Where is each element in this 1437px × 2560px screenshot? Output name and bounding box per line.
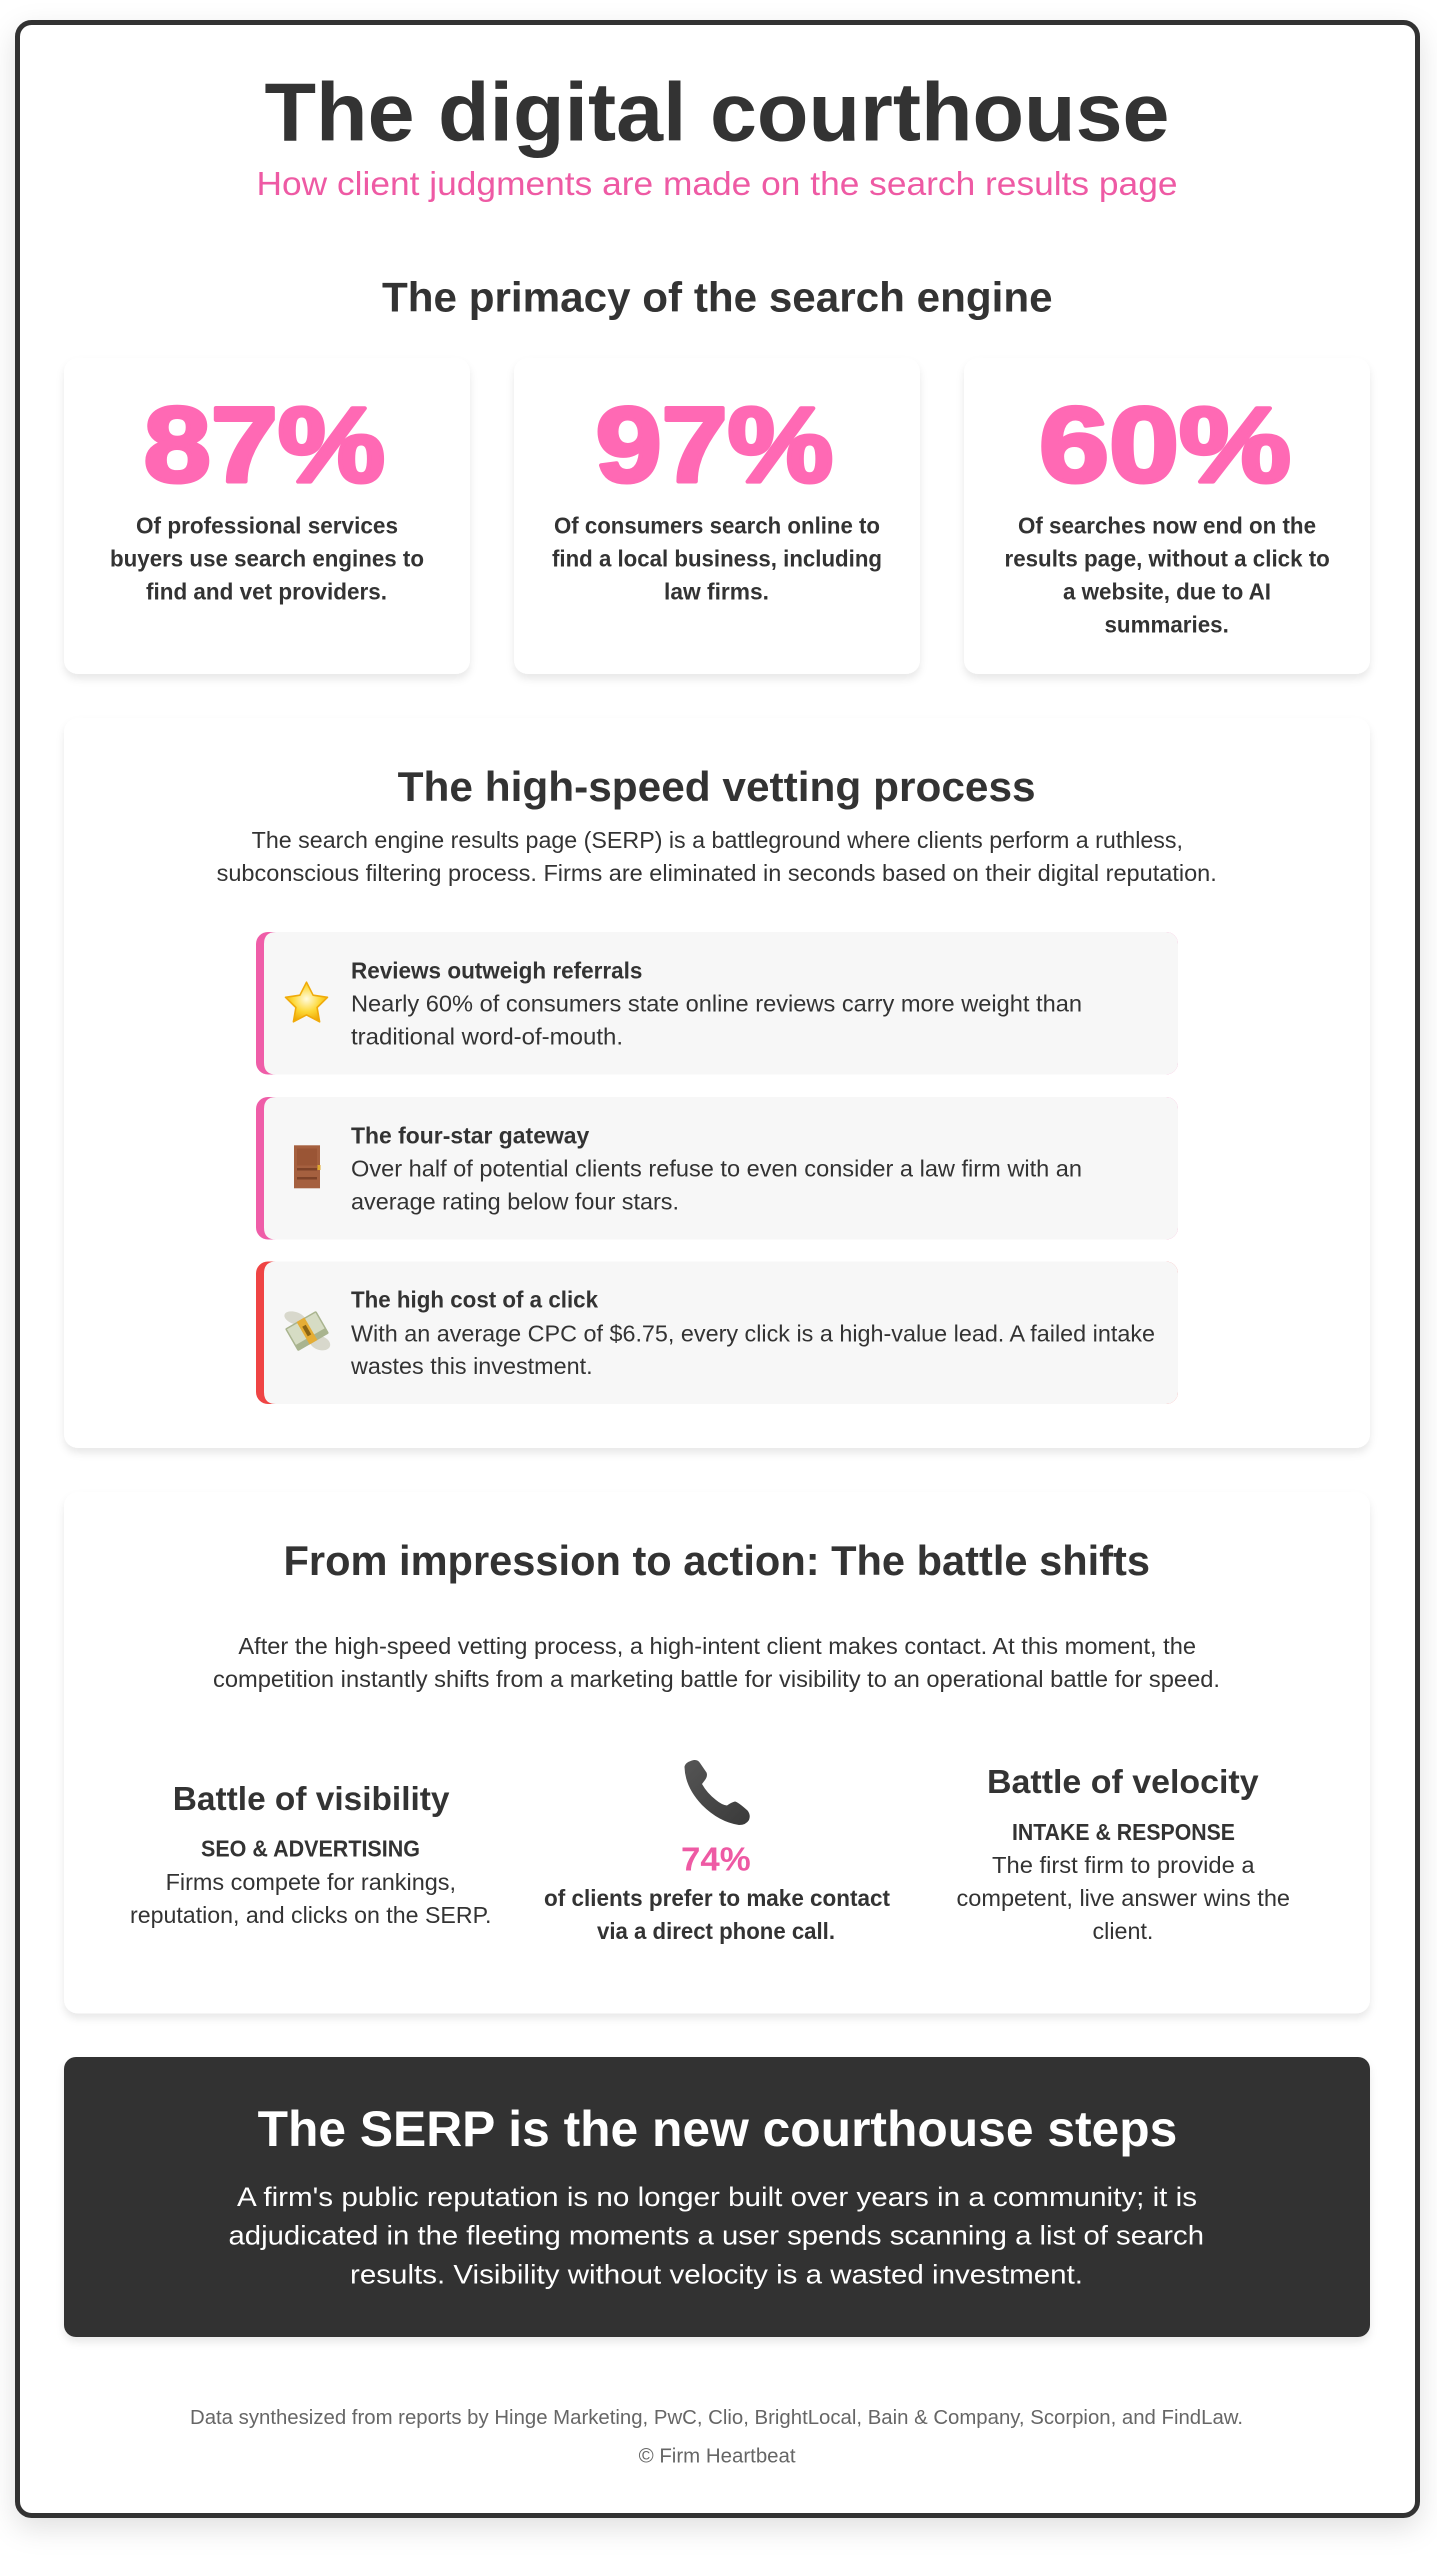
- conclusion text: [228, 2182, 1204, 2289]
- description: The first firm to provide a: [992, 1852, 1255, 1878]
- conclusion text: results. Visibility without velocity is a wasted investment.: [350, 2259, 1083, 2289]
- conclusion text: A firm's public reputation is no longer built over years in a community; it is: [237, 2182, 1197, 2212]
- icon: door: [294, 1145, 320, 1188]
- panel: high-speed vetting process: [64, 718, 1370, 1448]
- item text: The high cost of a click: [351, 1287, 598, 1313]
- item text: wastes this investment.: [350, 1353, 593, 1379]
- stat description: via a direct phone call.: [597, 1918, 835, 1944]
- description: Firms compete for rankings,: [166, 1869, 456, 1895]
- item text: Nearly 60% of consumers state online reviews carry more weight than: [351, 991, 1082, 1017]
- subtitle: How client judgments are made on the search results page: [256, 165, 1178, 202]
- intro paragraph: [217, 827, 1217, 886]
- item text: The four-star gateway: [351, 1122, 589, 1148]
- item text: traditional word-of-mouth.: [351, 1023, 623, 1049]
- stat card: 97%: [514, 358, 920, 674]
- item text: [350, 1287, 1155, 1379]
- stat number: 97%: [596, 384, 833, 504]
- column: phone stat: [544, 1760, 890, 1944]
- stat description: [544, 1885, 890, 1944]
- intro paragraph: The search engine results page (SERP) is a battleground where clients perform a ruthless,: [252, 827, 1183, 853]
- stat description: summaries.: [1104, 612, 1229, 638]
- conclusion text: adjudicated in the fleeting moments a user spends scanning a list of search: [228, 2221, 1204, 2251]
- heading: The high-speed vetting process: [398, 763, 1036, 810]
- stat card: 87%: [64, 358, 470, 674]
- item: the four-star gateway: [256, 1097, 1178, 1240]
- intro paragraph: After the high-speed vetting process, a high-intent client makes contact. At this moment, the: [238, 1633, 1196, 1659]
- footer copyright: © Firm Heartbeat: [639, 2446, 796, 2468]
- label: INTAKE & RESPONSE: [1012, 1819, 1235, 1845]
- stat description: results page, without a click to: [1004, 546, 1330, 572]
- description: [130, 1869, 492, 1928]
- stat description: law firms.: [664, 579, 769, 605]
- intro paragraph: subconscious filtering process. Firms are eliminated in seconds based on their digital reputation.: [217, 860, 1217, 886]
- item text: [351, 958, 1082, 1049]
- stat description: Of searches now end on the: [1018, 513, 1316, 539]
- stat card: 60%: [964, 358, 1370, 674]
- stat description: find and vet providers.: [146, 579, 387, 605]
- stat description: [110, 513, 424, 605]
- column: battle of visibility: [130, 1780, 492, 1928]
- heading: the primacy of the search engine: The primacy of the search engine: [382, 274, 1053, 321]
- stat description: find a local business, including: [552, 546, 882, 572]
- icon: money with wings: [283, 1309, 332, 1353]
- stat description: buyers use search engines to: [110, 546, 424, 572]
- label: SEO & ADVERTISING: [201, 1836, 420, 1862]
- item: the high cost of a click: [256, 1262, 1178, 1404]
- heading: From impression to action: The battle shifts: [284, 1537, 1150, 1584]
- item: reviews outweigh referrals: [256, 932, 1178, 1074]
- stat description: a website, due to AI: [1063, 579, 1271, 605]
- title: The digital courthouse: [264, 66, 1170, 159]
- intro paragraph: [213, 1633, 1220, 1692]
- stat number: 74%: [681, 1841, 751, 1878]
- item text: With an average CPC of $6.75, every click is a high-value lead. A failed intake: [351, 1320, 1155, 1346]
- panel: from impression to action: [64, 1492, 1370, 2014]
- footer sources: Data synthesized from reports by Hinge Marketing, PwC, Clio, BrightLocal, Bain & Company, Scorpion, and FindLaw.: [190, 2407, 1243, 2429]
- stat description: [1004, 513, 1330, 638]
- conclusion heading: The SERP is the new courthouse steps: [258, 2101, 1177, 2157]
- icon: star: [286, 982, 328, 1022]
- icon: telephone receiver: [684, 1760, 750, 1825]
- description: reputation, and clicks on the SERP.: [130, 1902, 492, 1928]
- panel: conclusion: [64, 2057, 1370, 2337]
- stat description: of clients prefer to make contact: [544, 1885, 890, 1911]
- column: battle of velocity: [956, 1763, 1290, 1944]
- description: competent, live answer wins the: [956, 1885, 1290, 1911]
- stat number: 87%: [144, 384, 385, 504]
- item text: Reviews outweigh referrals: [351, 958, 642, 984]
- stat description: Of consumers search online to: [554, 513, 880, 539]
- intro paragraph: competition instantly shifts from a marketing battle for visibility to an operational battle for speed.: [213, 1666, 1220, 1692]
- description: client.: [1092, 1918, 1153, 1944]
- item text: [351, 1122, 1082, 1214]
- item text: average rating below four stars.: [351, 1188, 679, 1214]
- stat description: [552, 513, 882, 605]
- stat number: 60%: [1039, 384, 1291, 504]
- description: [956, 1852, 1290, 1944]
- column: battle of velocity: Battle of velocity: [987, 1763, 1259, 1800]
- item text: Over half of potential clients refuse to even consider a law firm with an: [351, 1155, 1082, 1181]
- stat description: Of professional services: [136, 513, 398, 539]
- column: battle of visibility: Battle of visibility: [173, 1780, 450, 1817]
